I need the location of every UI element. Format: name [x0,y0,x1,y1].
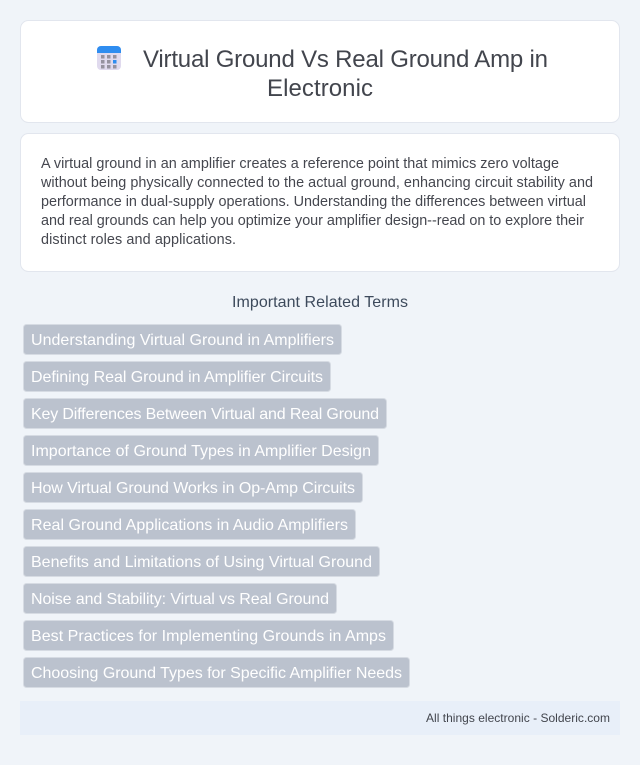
icon: calendar grid [97,46,121,70]
term tag 5: How Virtual Ground Works in Op-Amp Circuits [31,480,355,497]
term tag 10: Choosing Ground Types for Specific Amplifier Needs [31,665,402,682]
panel: intro text: and real grounds can help you optimize your amplifier design--read on to explore their [41,213,584,229]
term tag 2 [24,362,330,392]
title [143,46,548,102]
footer: All things electronic - Solderic.com [426,711,610,725]
panel: intro text: distinct roles and applications. [41,232,236,248]
footer [20,701,620,735]
term tag 3: Key Differences Between Virtual and Real Ground [31,406,379,423]
term tag 7 [24,546,380,576]
term tag 5 [24,472,362,502]
related terms list [24,324,410,688]
term tag 9 [24,620,394,650]
title panel [20,20,620,122]
term tag 4: Importance of Ground Types in Amplifier Design [31,443,371,460]
term tag 1: Understanding Virtual Ground in Amplifiers [31,332,334,349]
term tag 2: Defining Real Ground in Amplifier Circuits [31,369,323,386]
term tag 7: Benefits and Limitations of Using Virtual Ground [31,554,372,571]
term tag 6 [24,510,356,540]
title: Virtual Ground Vs Real Ground Amp in [143,46,548,73]
title: Electronic [267,75,373,102]
panel: intro text: A virtual ground in an amplifier creates a reference point that mimics zero voltage [41,156,559,172]
term tag 3 [24,398,386,428]
heading: important related terms: Important Related Terms [232,294,408,311]
term tag 10 [24,658,410,688]
term tag 1 [24,324,342,354]
term tag 8: Noise and Stability: Virtual vs Real Ground [31,591,329,608]
term tag 6: Real Ground Applications in Audio Amplifiers [31,517,348,534]
term tag 9: Best Practices for Implementing Grounds in Amps [31,628,386,645]
panel: intro text: without being physically connected to the actual ground, enhancing circuit stability and [40,175,593,191]
panel: intro text: performance in dual-supply operations. Understanding the differences between virtual [41,194,586,210]
term tag 8 [24,584,336,614]
panel: intro text [20,134,620,272]
term tag 4 [24,436,378,466]
